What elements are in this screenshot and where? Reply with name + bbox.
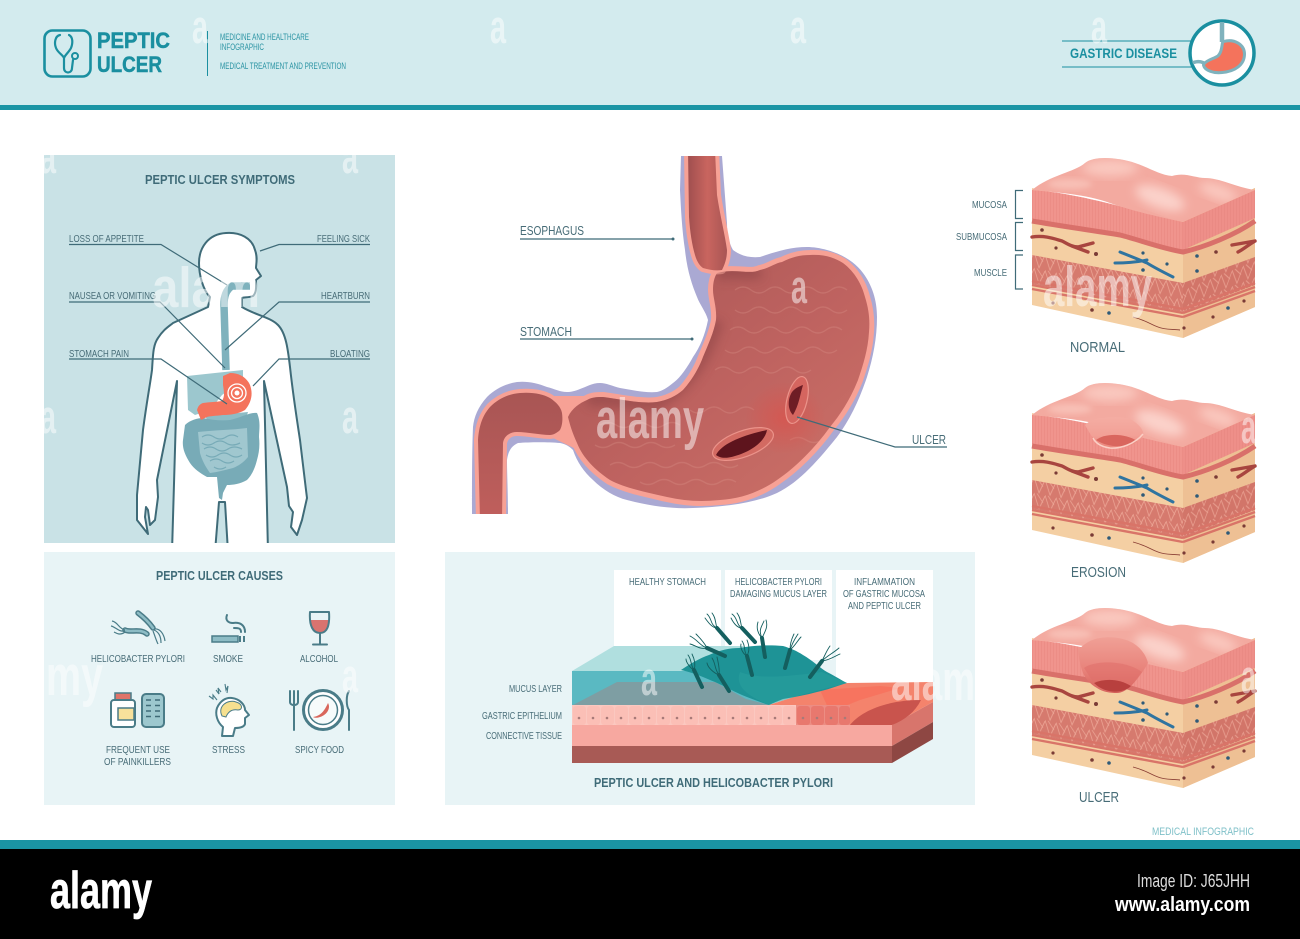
gastric folds — [587, 270, 847, 484]
icon: smoke — [212, 615, 245, 642]
watermarks: alamy — [596, 387, 704, 451]
watermarks: my — [46, 644, 103, 708]
watermarks: a — [40, 390, 57, 443]
watermarks: a — [790, 0, 807, 53]
image id: Image ID: J65JHH — [1137, 871, 1250, 891]
watermarks: a — [342, 390, 359, 443]
watermarks — [40, 0, 1256, 713]
mucus layer — [572, 645, 847, 705]
watermarks: a — [1241, 650, 1256, 703]
watermarks: a — [1091, 0, 1108, 53]
layer labels: MUCOSA — [972, 199, 1007, 211]
icon: painkillers — [111, 693, 164, 727]
cause labels: SMOKE — [213, 653, 243, 665]
tissue: normal — [956, 158, 1255, 356]
heading: causes: PEPTIC ULCER CAUSES — [156, 569, 283, 583]
diagram labels: CONNECTIVE TISSUE — [486, 730, 562, 742]
title: ULCER — [97, 52, 162, 77]
caption: EROSION — [1071, 564, 1126, 581]
website: www.alamy.com — [1114, 894, 1250, 916]
watermarks: a — [1241, 400, 1256, 453]
gastric disease badge — [1062, 20, 1254, 85]
alamy logo: alamy — [50, 862, 152, 920]
tissue: erosion — [1032, 383, 1255, 581]
cause labels: SPICY FOOD — [295, 744, 344, 756]
cause labels — [91, 653, 344, 768]
cause labels: HELICOBACTER PYLORI — [91, 653, 185, 665]
watermarks: a — [40, 130, 57, 183]
diagram labels: OF GASTRIC MUCOSA — [843, 588, 925, 600]
icon: stress — [209, 684, 249, 736]
symptom labels — [69, 233, 370, 404]
symptom labels: LOSS OF APPETITE — [69, 233, 144, 245]
ulcer: upper — [785, 376, 809, 424]
icon: helicobacter pylori — [111, 613, 165, 644]
gastric disease badge: GASTRIC DISEASE — [1070, 45, 1177, 61]
bacteria — [686, 613, 840, 691]
watermarks: alam — [891, 649, 975, 713]
symptom labels: HEARTBURN — [321, 290, 370, 302]
duodenum — [478, 393, 562, 520]
stomach outer wall — [472, 156, 877, 514]
stomach labels: STOMACH — [520, 325, 572, 339]
icon: stethoscope logo — [44, 30, 90, 76]
diagram labels: HELICOBACTER PYLORI — [735, 576, 822, 588]
cause labels: ALCOHOL — [300, 653, 338, 665]
large intestine — [183, 413, 260, 500]
symptom labels: BLOATING — [330, 348, 370, 360]
esophagus — [224, 286, 250, 370]
cause labels: OF PAINKILLERS — [104, 756, 171, 768]
stomach cross-section — [472, 150, 877, 520]
title — [97, 28, 170, 77]
liver — [187, 370, 243, 415]
caption: ULCER — [1079, 789, 1119, 806]
esophagus — [688, 150, 727, 270]
ulcer: lower — [712, 427, 774, 461]
subtitle text: INFOGRAPHIC — [220, 42, 264, 52]
stomach labels — [520, 224, 947, 447]
diagram labels: HEALTHY STOMACH — [629, 576, 706, 588]
stage boxes — [614, 570, 933, 685]
small intestine — [198, 428, 248, 473]
crater: ulcer — [1078, 637, 1148, 693]
stomach labels: ESOPHAGUS — [520, 224, 584, 238]
layer labels — [956, 190, 1023, 289]
tissue block — [572, 613, 933, 763]
heading: symptoms: PEPTIC ULCER SYMPTOMS — [145, 173, 295, 187]
subtitle text — [220, 32, 346, 71]
icon: alcohol — [310, 612, 329, 644]
cause labels: STRESS — [212, 744, 245, 756]
crater: erosion — [1085, 417, 1143, 448]
caption: NORMAL — [1070, 339, 1125, 356]
symptom labels: FEELING SICK — [317, 233, 370, 245]
watermarks: a — [490, 0, 507, 53]
panel: pylori diagram — [445, 552, 975, 805]
watermarks: a — [342, 130, 359, 183]
stomach labels: ULCER — [912, 433, 946, 447]
watermarks: a — [641, 652, 658, 705]
layer labels: SUBMUCOSA — [956, 231, 1007, 243]
panel: symptoms — [44, 155, 395, 552]
diagram labels: AND PEPTIC ULCER — [848, 600, 921, 612]
pancreas — [205, 412, 248, 421]
watermarks: alamy — [1043, 255, 1152, 319]
subtitle text: MEDICAL TREATMENT AND PREVENTION — [220, 61, 346, 71]
watermarks: a — [342, 649, 359, 702]
subtitle text: MEDICINE AND HEALTHCARE — [220, 32, 309, 42]
footer band — [0, 826, 1300, 939]
tissue: ulcer — [1032, 608, 1255, 806]
watermarks: alam — [152, 256, 260, 320]
diagram labels: MUCUS LAYER — [509, 683, 562, 695]
watermarks: a — [791, 260, 808, 313]
watermarks: a — [192, 0, 209, 53]
diagram labels — [482, 576, 925, 742]
icon: spicy food — [290, 690, 349, 730]
body silhouette — [137, 233, 307, 552]
symptom labels: NAUSEA OR VOMITING — [69, 290, 156, 302]
heading: pylori: PEPTIC ULCER AND HELICOBACTER PYLORI — [594, 776, 833, 790]
header band — [0, 0, 1300, 110]
diagram labels: DAMAGING MUCUS LAYER — [730, 588, 827, 600]
diagram labels: GASTRIC EPITHELIUM — [482, 710, 562, 722]
title: PEPTIC — [97, 28, 170, 53]
cause labels: FREQUENT USE — [106, 744, 170, 756]
stomach with pain rings — [197, 373, 252, 420]
stomach interior — [568, 255, 869, 501]
layer labels: MUSCLE — [974, 267, 1007, 279]
diagram labels: INFLAMMATION — [854, 576, 915, 588]
symptom labels: STOMACH PAIN — [69, 348, 129, 360]
footer band: MEDICAL INFOGRAPHIC — [1152, 826, 1254, 838]
panel: causes — [44, 552, 395, 805]
